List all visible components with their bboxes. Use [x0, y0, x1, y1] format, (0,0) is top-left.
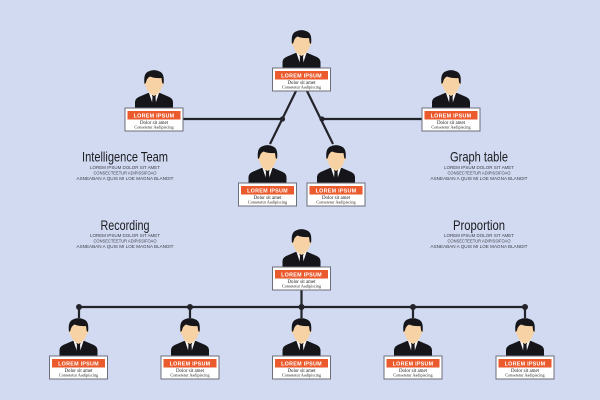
person card: bottom 3: [272, 318, 330, 379]
person card: middle left: LOREM IPSUM: [247, 188, 288, 194]
person card: middle left: Consetetur Aadipiscing: [248, 199, 288, 204]
text block: Intelligence Team: Intelligence Team: [82, 148, 168, 164]
text block: Intelligence Team: [76, 148, 174, 181]
person card: bottom 4: Dolor sit amet: [399, 369, 428, 374]
person card: right: LOREM IPSUM: [431, 113, 472, 119]
text block: Graph table: CONSECTEETUR ADIPISSIFOAO: [448, 170, 511, 176]
text block: Recording: CONSECTEETUR ADIPISSIFOAO: [94, 238, 157, 244]
person card: top: [272, 30, 330, 91]
person card: bottom 1: LOREM IPSUM: [58, 361, 99, 367]
person card: left: [125, 70, 183, 131]
person card: bottom 3: Consetetur Aadipiscing: [282, 372, 322, 377]
person card: bottom 1: Dolor sit amet: [65, 369, 93, 374]
person card: top: LOREM IPSUM: [281, 73, 322, 79]
text block: Recording: LOREM IPSUM DOLOR SIT AMET: [90, 233, 160, 238]
person card: bottom 2: [161, 318, 219, 379]
person card: bottom 5: [496, 318, 554, 379]
person card: left: LOREM IPSUM: [134, 113, 175, 119]
person card: bottom 1: [50, 318, 108, 379]
person card: middle right: LOREM IPSUM: [316, 188, 357, 194]
person card: middle left: [238, 145, 296, 206]
text block: Recording: ASNEABAN A QUIS MI LOE MAGNA BLANDIT: [76, 244, 174, 249]
person card: bottom 5: LOREM IPSUM: [505, 361, 546, 367]
text block: Intelligence Team: CONSECTEETUR ADIPISSIFOAO: [94, 170, 157, 176]
person card: middle right: Consetetur Aadipiscing: [316, 199, 356, 204]
person card: bottom 1: Consetetur Aadipiscing: [59, 372, 99, 377]
text block: Proportion: [430, 217, 528, 249]
person card: middle right: [307, 145, 365, 206]
person card: bottom 4: [384, 318, 442, 379]
text block: Graph table: LOREM IPSUM DOLOR SIT AMET: [444, 165, 514, 170]
person card: bottom 2: Consetetur Aadipiscing: [170, 372, 210, 377]
person card: middle left: Dolor sit amet: [254, 196, 282, 201]
person card: bottom 5: Dolor sit amet: [511, 369, 540, 374]
text block: Proportion: ASNEABAN A QUIS MI LOE MAGNA BLANDIT: [430, 244, 528, 249]
person card: bottom 4: LOREM IPSUM: [393, 361, 434, 367]
text block: Intelligence Team: ASNEABAN A QUIS MI LOE MAGNA BLANDIT: [76, 176, 174, 181]
person card: bottom 5: Consetetur Aadipiscing: [505, 372, 545, 377]
person card: right: Consetetur Aadipiscing: [431, 124, 471, 129]
person card: middle right: Dolor sit amet: [322, 196, 351, 201]
text block: Recording: Recording: [100, 217, 150, 233]
person card: bottom 4: Consetetur Aadipiscing: [393, 372, 433, 377]
person card: top: Consetetur Aadipiscing: [282, 84, 322, 89]
text block: Graph table: ASNEABAN A QUIS MI LOE MAGNA BLANDIT: [430, 176, 528, 181]
text block: Recording: [76, 217, 174, 249]
text block: Proportion: Proportion: [453, 217, 505, 233]
person card: left: Consetetur Aadipiscing: [134, 124, 174, 129]
person card: right: [422, 70, 480, 131]
person card: lower chart head: Consetetur Aadipiscing: [282, 283, 322, 288]
text block: Graph table: Graph table: [450, 148, 508, 164]
person card: bottom 2: Dolor sit amet: [176, 369, 205, 374]
person card: bottom 3: LOREM IPSUM: [281, 361, 322, 367]
text block: Proportion: LOREM IPSUM DOLOR SIT AMET: [444, 233, 514, 238]
person card: right: Dolor sit amet: [437, 121, 466, 126]
text block: Intelligence Team: LOREM IPSUM DOLOR SIT AMET: [90, 165, 160, 170]
text block: Proportion: CONSECTEETUR ADIPISSIFOAO: [448, 238, 511, 244]
person card: bottom 2: LOREM IPSUM: [170, 361, 211, 367]
person card: top: Dolor sit amet: [288, 81, 316, 86]
person card: lower chart head: LOREM IPSUM: [281, 272, 322, 278]
connector lines: upper chart: [183, 91, 422, 144]
text block: Graph table: [430, 148, 528, 181]
person card: lower chart head: Dolor sit amet: [288, 280, 316, 285]
person card: left: Dolor sit amet: [140, 121, 169, 126]
person card: lower chart head: [272, 229, 330, 290]
connector lines: lower chart: [76, 289, 528, 318]
person card: bottom 3: Dolor sit amet: [288, 369, 316, 374]
